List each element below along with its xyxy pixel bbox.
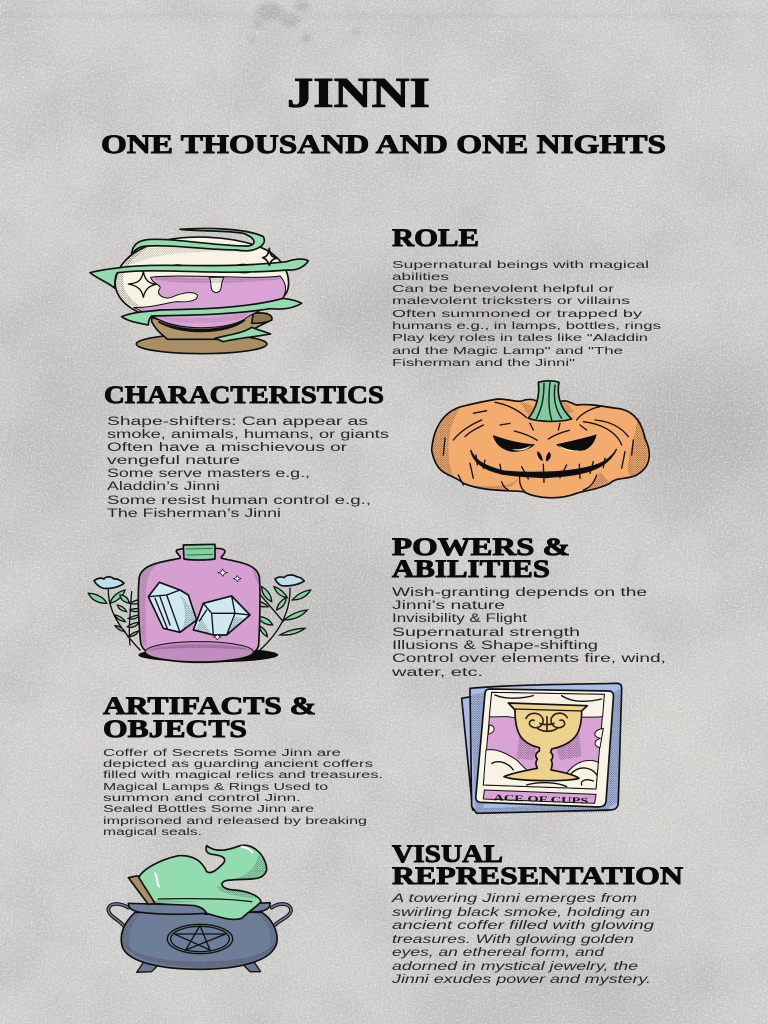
pumpkin body [432, 399, 649, 498]
cauldron legs [137, 958, 261, 972]
icon: crystal ball [90, 228, 308, 354]
heading: powers and abilities: POWERS & [392, 534, 570, 561]
heading: role: ROLE [392, 225, 479, 252]
text: characteristics: Aladdin’s Jinni [107, 481, 220, 493]
card label: ace of cups [483, 790, 596, 806]
text: powers and abilities [390, 587, 666, 679]
text: role: and the Magic Lamp" and "The [392, 345, 623, 357]
pumpkin stem [528, 381, 572, 421]
text: role: Play key roles in tales like "Aladdin [392, 332, 648, 344]
text: powers and abilities: Jinni’s nature [392, 600, 505, 612]
text: artifacts and objects: imprisoned and released by breaking [103, 816, 367, 827]
heading: artifacts and objects [103, 693, 316, 743]
text: visual representation [390, 893, 655, 986]
pentagram emblem [167, 924, 233, 954]
icon: ace of cups tarot card [462, 683, 622, 813]
sparkles [214, 569, 241, 640]
text: characteristics: Often have a mischievous or [107, 442, 347, 454]
text: artifacts and objects: filled with magical relics and treasures. [103, 770, 383, 781]
subtitle: ONE THOUSAND AND ONE NIGHTS [101, 130, 666, 159]
heading: artifacts and objects: ARTIFACTS & [103, 693, 316, 720]
crystals [148, 582, 250, 635]
text: visual representation: adorned in mystical jewelry, the [392, 961, 638, 973]
text: role: Can be benevolent helpful or [392, 283, 615, 295]
text: visual representation: ancient coffer filled with glowing [392, 920, 655, 932]
text: role: Supernatural beings with magical [392, 259, 649, 271]
heading: powers and abilities [392, 534, 570, 583]
green smoke [138, 845, 267, 919]
text: characteristics: Shape-shifters: Can appear as [107, 416, 368, 428]
right plant [252, 575, 311, 650]
text: powers and abilities: water, etc. [390, 667, 483, 679]
text: artifacts and objects: Sealed Bottles Some Jinn are [103, 804, 315, 815]
heading: visual representation: VISUAL [392, 841, 503, 868]
text: characteristics: Some serve masters e.g., [107, 468, 310, 480]
text: visual representation: A towering Jinni emerges from [390, 893, 638, 905]
left plant [88, 577, 147, 650]
heading: powers and abilities: ABILITIES [392, 556, 550, 583]
text: role: Fisherman and the Jinni" [392, 357, 575, 369]
back cards [462, 683, 622, 813]
icon: jack-o-lantern pumpkin [432, 381, 649, 498]
text: powers and abilities: Wish-granting depends on the [392, 587, 647, 599]
heading: artifacts and objects: OBJECTS [103, 716, 247, 743]
icon: cauldron with green smoke [108, 845, 291, 972]
text: characteristics: smoke, animals, humans, or giants [107, 429, 389, 441]
text: role: Often summoned or trapped by [392, 308, 643, 320]
crystal ball base [136, 313, 272, 354]
text: role: malevolent tricksters or villains [392, 295, 630, 307]
text: visual representation: treasures. With glowing golden [392, 934, 634, 946]
text: artifacts and objects: depicted as guarding ancient coffers [103, 759, 373, 770]
heading: visual representation [392, 841, 683, 890]
text: role: abilities [392, 271, 449, 283]
text: role [392, 259, 661, 369]
wooden spoon [128, 876, 155, 904]
text: visual representation: swirling black smoke, holding an [392, 907, 650, 919]
text: visual representation: Jinni exudes power and mystery. [390, 974, 651, 986]
cauldron handles [108, 904, 291, 927]
shadow [138, 648, 278, 662]
jar body [138, 544, 260, 662]
text: characteristics: The Fisherman’s Jinni [107, 508, 281, 520]
pumpkin face [471, 430, 617, 482]
icon: jar with crystals and plants [88, 544, 311, 662]
text: powers and abilities: Invisibility & Flight [392, 613, 528, 625]
crystal ball globe [115, 237, 289, 331]
text: powers and abilities: Illusions & Shape-shifting [392, 640, 598, 652]
text: artifacts and objects: Magical Lamps & Rings Used to [103, 782, 329, 793]
text: powers and abilities: Control over elements fire, wind, [392, 653, 666, 665]
text: artifacts and objects: magical seals. [103, 827, 202, 838]
cauldron pot [121, 903, 277, 969]
text: artifacts and objects: summon and control Jinn. [103, 793, 301, 804]
text: visual representation: eyes, an ethereal form, and [392, 947, 605, 959]
text: artifacts and objects: Coffer of Secrets Some Jinn are [103, 748, 342, 759]
card label: ace of cups: ACE OF CUPS [493, 792, 589, 806]
text: characteristics: Some resist human control e.g., [107, 495, 371, 507]
heading: characteristics: CHARACTERISTICS [104, 382, 384, 409]
front card [476, 689, 613, 807]
text: characteristics [107, 416, 389, 520]
text: role: humans e.g., in lamps, bottles, rings [392, 320, 661, 332]
cauldron rim front [128, 903, 207, 914]
title: JINNI [287, 71, 430, 117]
text: powers and abilities: Supernatural strength [392, 627, 580, 639]
golden chalice [504, 703, 587, 781]
text: characteristics: vengeful nature [107, 455, 240, 467]
heading: visual representation: REPRESENTATION [392, 863, 683, 890]
crystal ball green swirls [90, 228, 308, 342]
text: artifacts and objects [103, 748, 383, 838]
